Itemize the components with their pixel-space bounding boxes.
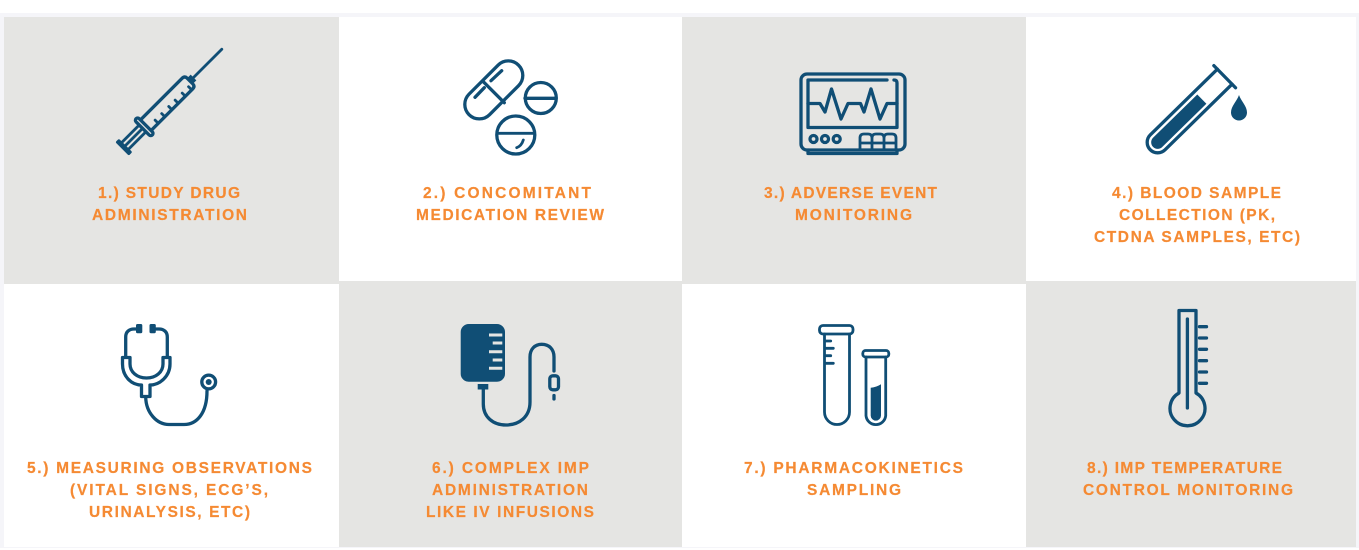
label: item 8: 8.) IMP TEMPERATURE [1087,460,1282,477]
label: item 2 [416,185,604,224]
label: item 6 [426,460,594,521]
panel: blood sample collection [1026,17,1356,281]
icon: two test tubes [820,326,889,425]
label: item 7 [744,460,963,499]
label: item 2: MEDICATION REVIEW [416,207,604,224]
label: item 6: 6.) COMPLEX IMP [432,460,589,477]
label: item 4: COLLECTION (PK, [1119,207,1275,224]
panel: concomitant medication review [339,17,682,281]
icon: IV infusion bag [461,324,558,425]
label: item 7: SAMPLING [807,482,901,499]
icon: patient monitor [801,74,905,154]
label: item 4 [1094,185,1300,246]
panel: study drug administration [4,17,339,284]
label: item 1: ADMINISTRATION [92,207,247,224]
label: item 5: URINALYSIS, ETC) [89,504,250,521]
label: item 3: MONITORING [795,207,912,224]
panel: adverse event monitoring [682,17,1026,284]
icon: test tube with blood drop [1139,66,1247,161]
icon: stethoscope [122,324,216,424]
label: item 1: 1.) STUDY DRUG [98,185,240,202]
panel: pharmacokinetics sampling [682,284,1026,547]
label: item 8: CONTROL MONITORING [1083,482,1293,499]
label: item 5: 5.) MEASURING OBSERVATIONS [27,460,312,477]
label: item 6: ADMINISTRATION [432,482,588,499]
label: item 4: CTDNA SAMPLES, ETC) [1094,229,1300,246]
icon: thermometer [1170,310,1206,426]
icon: syringe [114,41,230,157]
panel: IMP temperature control monitoring [1026,281,1356,547]
icon: pills [459,55,556,154]
label: item 2: 2.) CONCOMITANT [423,185,592,202]
label: item 5: (VITAL SIGNS, ECG’S, [70,482,268,499]
label: item 8 [1083,460,1293,499]
label: item 1 [92,185,247,224]
label: item 5 [27,460,312,521]
label: item 4: 4.) BLOOD SAMPLE [1112,185,1281,202]
label: item 6: LIKE IV INFUSIONS [426,504,594,521]
label: item 3 [764,185,938,224]
panel: measuring observations [4,284,339,547]
label: item 7: 7.) PHARMACOKINETICS [744,460,963,477]
panel: complex IMP administration [339,281,682,547]
label: item 3: 3.) ADVERSE EVENT [764,185,938,202]
